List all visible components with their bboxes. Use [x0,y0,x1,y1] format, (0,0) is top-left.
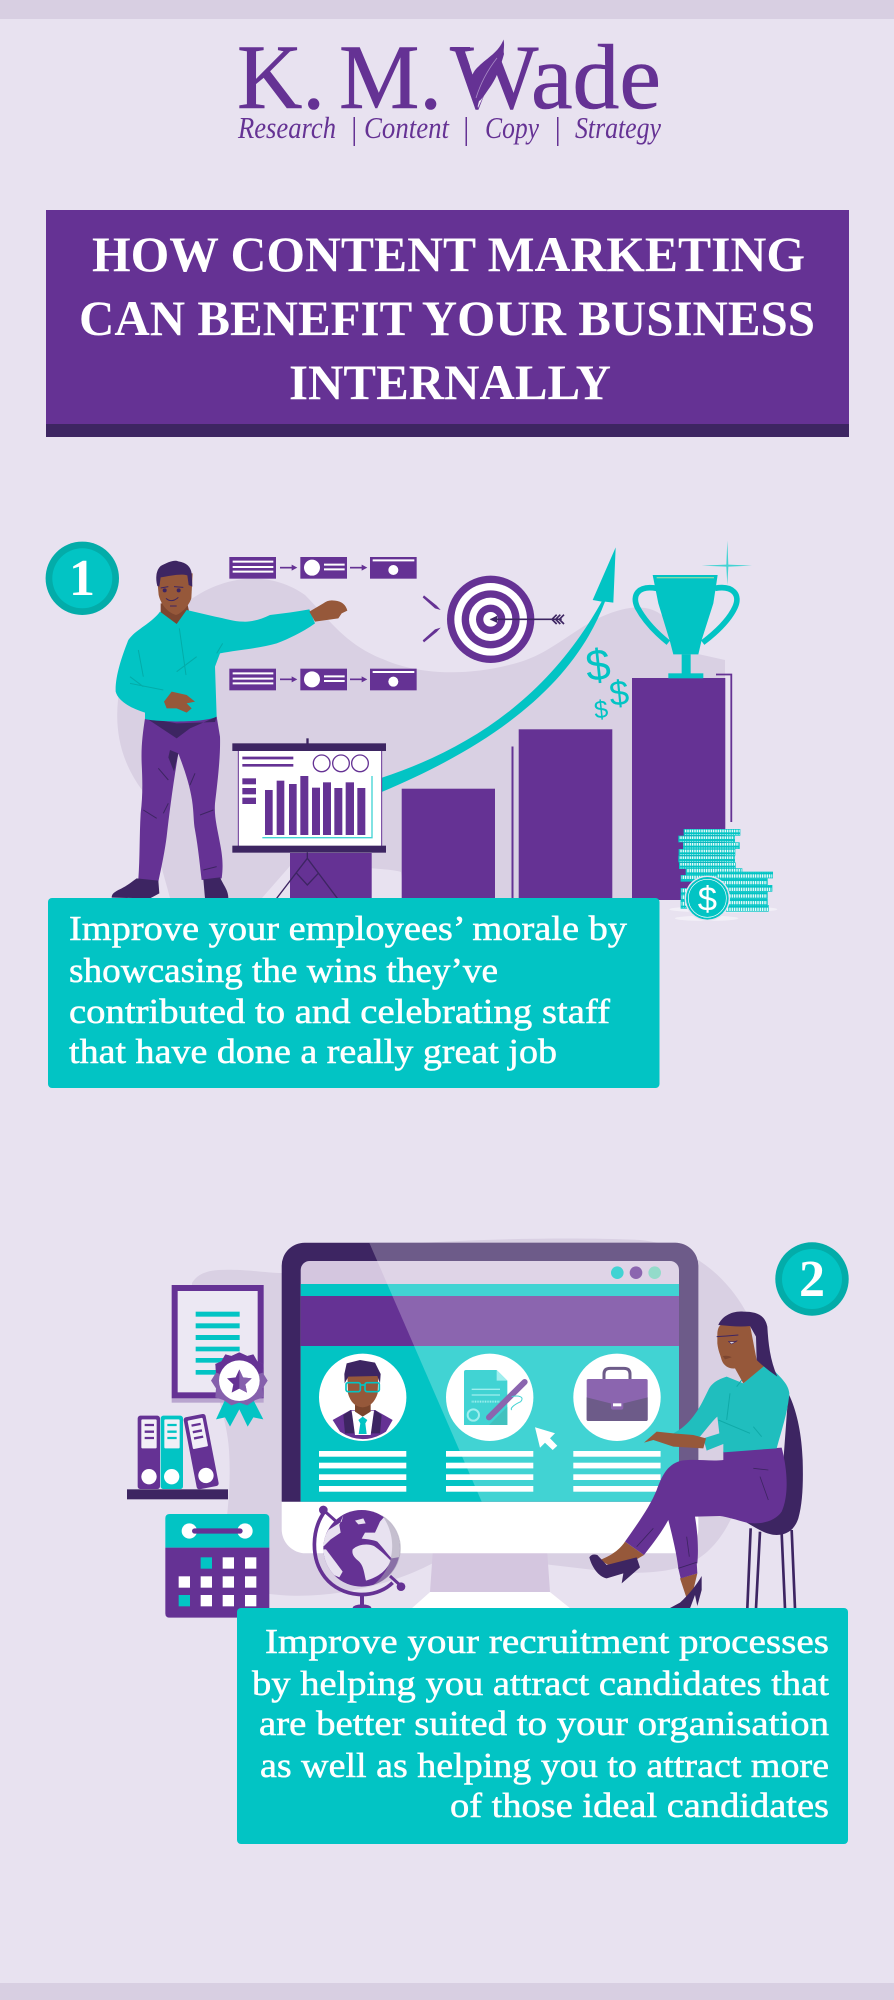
number badge 2 [775,1242,849,1316]
panel 2 text box: by helping you attract candidates that [252,1664,829,1703]
avatar icon [333,1360,393,1439]
background blob 2 [192,1238,762,1596]
mouse cursor [535,1427,557,1450]
logo: K. M. Wade: K. [237,26,325,128]
presentation screen [232,738,386,898]
logo: K. M. Wade [237,26,661,146]
coin stacks [669,829,777,921]
binders on shelf [127,1414,228,1499]
monitor [282,1243,698,1608]
panel 2 text box [237,1608,848,1844]
document and pen icon [464,1370,525,1425]
panel 2 text box: are better suited to your organisation [259,1704,829,1743]
certificate with award ribbon [172,1285,268,1427]
title banner [46,210,849,437]
background blob 1 [117,579,725,900]
dollar signs: $ [583,640,613,691]
panel 1 text box [48,898,660,1088]
logo: K. M. Wade: Research [237,110,336,145]
panel 1 text box: contributed to and celebrating staff [69,992,610,1031]
panel 1 text box: that have done a really great job [69,1032,557,1071]
target with arrow [423,576,564,663]
number badge 1 [46,542,119,615]
section 1 illustration: growth and presentation [112,541,752,900]
dollar signs: $ [607,673,631,714]
bar chart columns [290,674,731,900]
number badge 2: 2 [799,1251,825,1308]
logo: K. M. Wade: Strategy [575,110,661,145]
panel 2 text box: as well as helping you to attract more [260,1746,829,1785]
number badge 1: 1 [69,550,95,607]
trophy [635,541,752,678]
title banner: INTERNALLY [289,354,611,410]
dollar signs: $ [593,695,610,725]
panel 1 text box: showcasing the wins they’ve [69,951,498,990]
panel 1 text box: Improve your employees’ morale by [69,909,628,948]
screen gloss overlay [369,1243,698,1502]
seated woman [589,1312,803,1608]
growth arrow [380,547,616,793]
logo: K. M. Wade: M. [339,26,442,128]
logo: K. M. Wade: Content [364,110,450,145]
panel 2 text box: Improve your recruitment processes [265,1622,829,1661]
calendar [165,1514,269,1618]
title banner: CAN BENEFIT YOUR BUSINESS [79,290,815,346]
globe [314,1506,405,1612]
dollar signs [583,640,631,725]
title banner: HOW CONTENT MARKETING [92,226,805,282]
briefcase icon [587,1368,648,1421]
logo: K. M. Wade: Copy [485,110,539,145]
coin stacks: $ [698,881,717,919]
logo: K. M. Wade: Wade [450,26,661,128]
browser dots [611,1266,661,1279]
presenter man [112,561,347,898]
section 2 illustration: recruitment website [127,1238,803,1618]
profile cards [319,1354,661,1492]
flow diagrams [229,557,417,690]
panel 2 text box: of those ideal candidates [450,1786,829,1825]
